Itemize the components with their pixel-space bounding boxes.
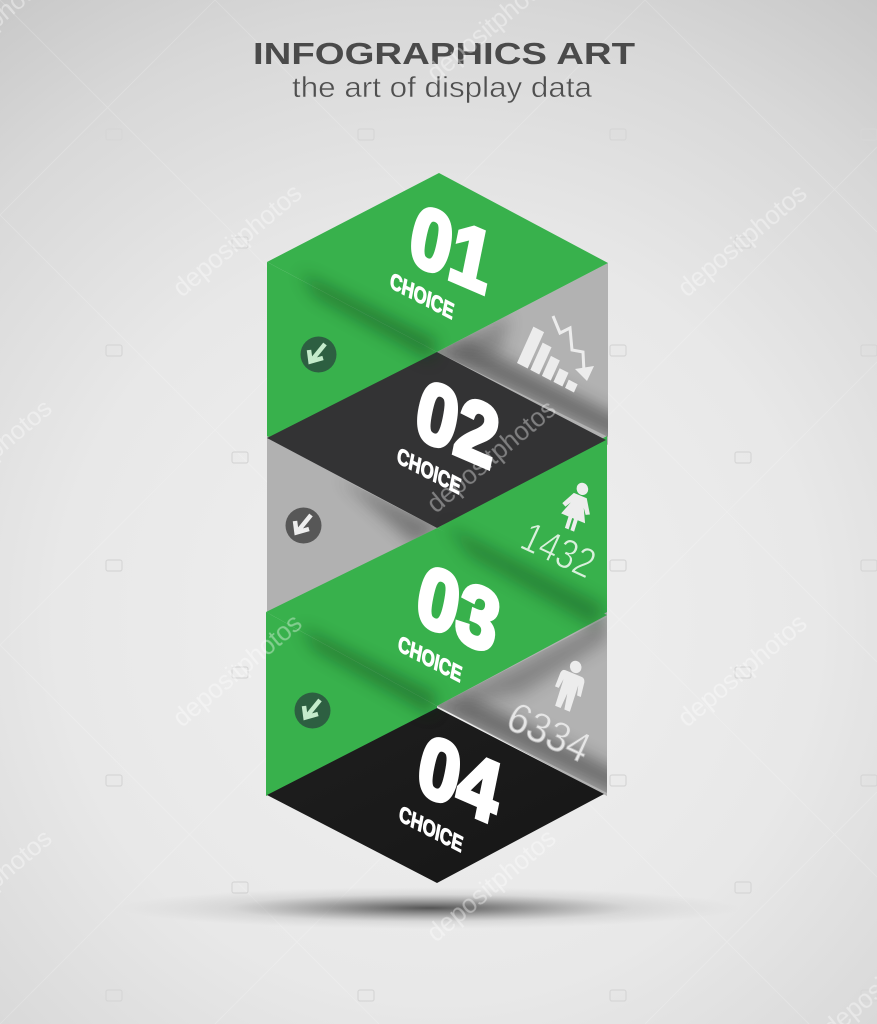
value: 1432: 1432: [514, 513, 603, 587]
label: choice 03: CHOICE: [396, 630, 464, 688]
icon: falling bar chart: [517, 316, 594, 392]
panel: choice 02: [267, 352, 606, 528]
panel: right gray 3: [437, 612, 607, 796]
value: 6334: 6334: [500, 693, 598, 772]
panel: left green 1: [267, 262, 437, 441]
panel: choice 01: [267, 173, 608, 352]
watermark cameras: [106, 129, 877, 1001]
number 02: 02: [408, 362, 506, 487]
watermark text: depositphotos: [673, 179, 813, 303]
subtitle: the art of display data: [292, 72, 593, 104]
panel: left green 3: [266, 612, 437, 796]
number 03: 03: [409, 547, 507, 672]
watermark text: depositphotos: [673, 609, 813, 733]
label: choice 01: CHOICE: [388, 267, 456, 325]
icon: arrow circle 2: [286, 508, 322, 544]
panel: right green 2: [437, 436, 607, 622]
icon: male person: [550, 656, 590, 714]
watermark text: depositphotos: [168, 179, 308, 303]
number 01: 01: [402, 187, 500, 312]
number 04: 04: [410, 717, 508, 842]
panel: left gray 2: [267, 436, 445, 616]
panel: choice 03: [266, 528, 607, 706]
icon: female person: [556, 478, 598, 535]
watermark text: depositphotos: [168, 609, 308, 733]
panel: right gray 1: [438, 263, 608, 445]
floor shadow: [120, 887, 740, 929]
title: INFOGRAPHICS ART: [253, 36, 635, 71]
icon: arrow circle 1: [300, 336, 336, 372]
icon: arrow circle 3: [294, 692, 330, 728]
fold shadows: [300, 272, 605, 716]
label: choice 04: CHOICE: [397, 800, 465, 858]
panel: choice 04: [267, 708, 604, 883]
watermark text: depositphotos: [422, 824, 562, 948]
label: choice 02: CHOICE: [395, 442, 463, 500]
watermark text: depositphotos: [422, 395, 562, 519]
